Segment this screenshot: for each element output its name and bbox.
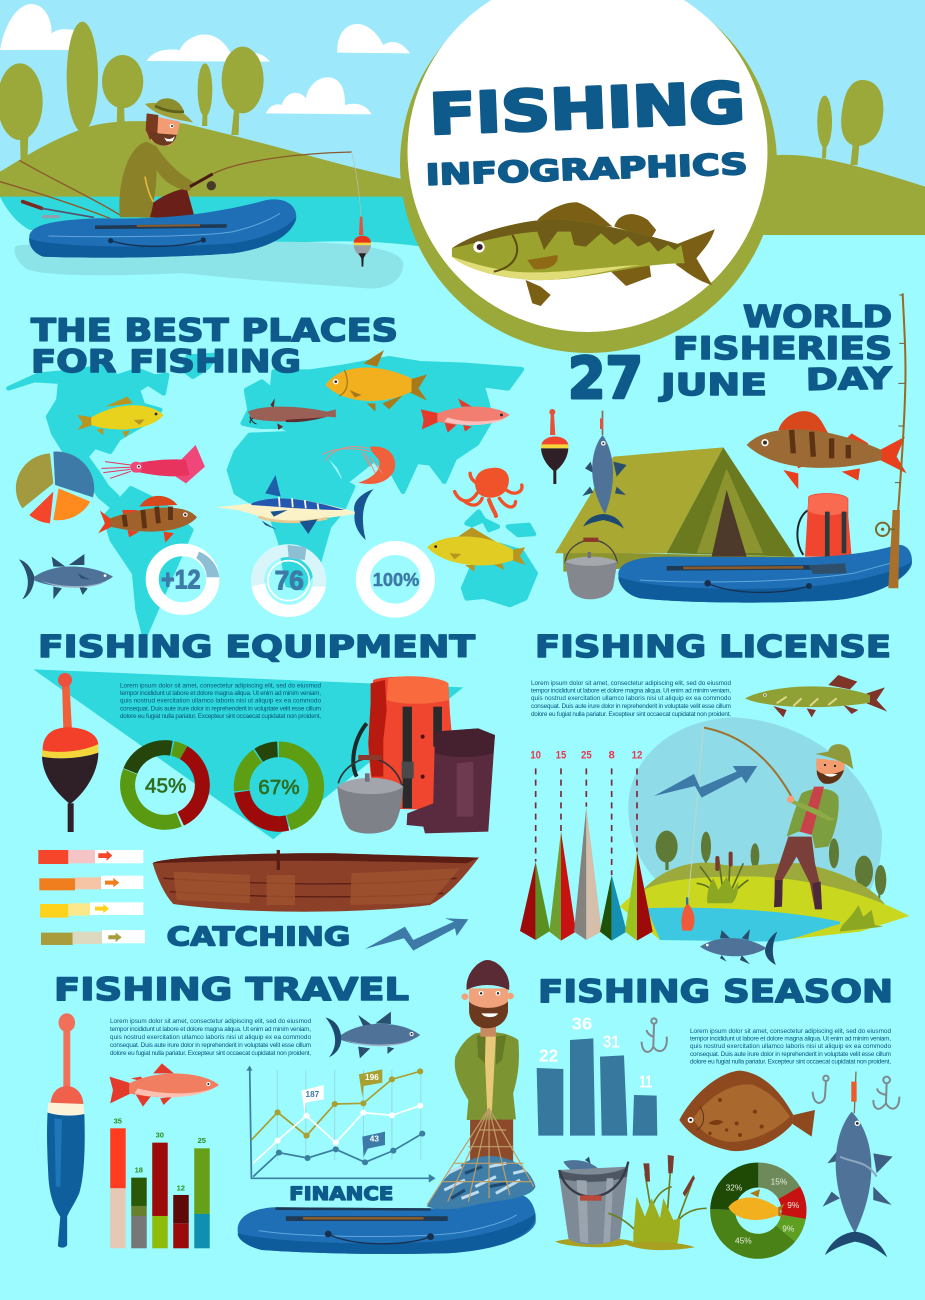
fish: tuna [19,554,113,599]
hanging tuna [823,1072,893,1257]
bar values: 31 [603,1032,620,1052]
bar 30: 30 [156,1130,164,1139]
world map [9,355,536,637]
equipment text block: quis nostrud exercitation ullamco laboris nisi ut aliquip ex ea commodo [120,698,321,705]
salmon [110,1063,219,1107]
travel text block [110,1018,311,1057]
boat with oar [618,545,912,603]
panel: fishing equipment [33,669,495,951]
heading: catching: CATCHING [167,921,350,951]
pyramid 25 [574,807,602,940]
pyramid values: 12 [632,749,642,761]
dashed guides [536,768,637,875]
subtitle: infographics: INFOGRAPHICS [425,147,748,192]
gold fish in centre [728,1189,785,1220]
fish: perch [98,496,197,543]
flag 196 [359,1069,382,1097]
bar values: 11 [639,1071,652,1091]
travel text block: consequat. Duis aute irure dolor in reprehenderit in voluptate velit esse cillum [110,1042,311,1049]
heading: fishing season: FISHING SEASON [538,974,893,1010]
bucket with fish [555,1157,633,1247]
backdrop blob [628,717,882,897]
badge ring [400,0,777,353]
fishing rod with line [190,152,361,217]
title badge [400,0,777,353]
trees on left hill [0,22,264,163]
heading: fishing license: FISHING LICENSE [535,630,891,665]
man with fishing net [455,960,519,1167]
clouds [0,4,410,114]
license text block: quis nostrud exercitation ullamco laboris nisi ut aliquip ex ea commodo [531,695,731,702]
wooden boat [153,850,479,912]
turquoise wedge [33,669,463,839]
equipment text block: tempor incididunt ut labore et dolore magna aliqua. Ut enim ad minim veniam, [120,690,321,697]
season text block: Lorem ipsum dolor sit amet, consectetur adipiscing elit, sed do eiusmod [690,1028,891,1035]
spare rods and oar [0,161,120,218]
flag 187 [301,1085,324,1114]
donut chart: 45% [114,734,216,836]
donut chart: 45%: 45% [145,775,186,798]
season text block: tempor incididunt ut labore et dolore magna aliqua. Ut enim ad minim veniam, [690,1036,891,1042]
perch [747,411,907,489]
fish: yellow carp lower [427,527,525,572]
treble hook [642,1018,667,1052]
fish: gold crucian [325,350,427,412]
panel: world map of fishing places [9,350,536,637]
donut chart: 67%: 67% [258,776,300,799]
donut labels: 32% [726,1182,743,1192]
title: fishing: FISHING [428,71,746,148]
hanging tuna [582,411,627,529]
panel: fishing license [520,675,909,965]
date: 27 june: JUNE [658,368,767,403]
tall fishing rod [876,293,905,588]
tent [555,447,795,572]
large float [42,673,98,832]
license text block: Lorem ipsum dolor sit amet, consectetur adipiscing elit, sed do eiusmod [531,680,731,687]
boat reflection [15,242,403,289]
heading: fishing travel: FISHING TRAVEL [54,972,409,1008]
season text block: consequat. Duis aute irure dolor in reprehenderit in voluptate velit esse cillum [690,1051,891,1058]
pike [745,675,887,717]
olive hills [640,863,887,907]
pyramid values: 25 [581,749,592,761]
progress ring: 100%: 100% [373,570,419,591]
backpack [353,676,453,810]
treble hook right [873,1077,899,1109]
pyramid values: 15 [556,749,566,761]
donut labels: 45% [735,1235,752,1245]
heading: the best places for fishing [31,313,398,380]
progress ring: +12 [152,550,219,609]
inflatable boat [29,199,296,258]
cooking pot [337,755,403,834]
tall float [47,1013,85,1248]
season text block: quis nostrud exercitation ullamco laboris nisi ut aliquip ex ea commodo [690,1043,891,1050]
license text block: tempor incididunt ut labore et dolore magna aliqua. Ut enim ad minim veniam, [531,688,731,694]
flag 196: 196 [365,1073,379,1082]
travel text block: dolore eu fugiat nulla pariatur. Excepteur sint occaecat cupidatat non proident, [110,1050,311,1057]
travel text block: quis nostrud exercitation ullamco laboris nisi ut aliquip ex ea commodo [110,1034,311,1041]
license text block: consequat. Duis aute irure dolor in reprehenderit in voluptate velit esse cillum [531,703,731,710]
date: 27 june [568,346,767,412]
progress ring: 100% [363,548,428,611]
season donut chart [708,1160,809,1261]
progress ring: +12: +12 [161,564,201,595]
donut labels: 9% [787,1200,800,1210]
travel text block: Lorem ipsum dolor sit amet, consectetur adipiscing elit, sed do eiusmod [110,1018,311,1025]
equipment text block: consequat. Duis aute irure dolor in reprehenderit in voluptate velit esse cillum [120,705,321,712]
fish: salmon [421,398,510,433]
reeds [608,1155,707,1250]
fish: yellow carp [77,397,164,437]
net with catch [427,1108,536,1209]
flag 187: 187 [305,1090,320,1099]
flag 43 [362,1132,385,1157]
heading: world fisheries day: WORLD [743,300,892,335]
tuna [325,1012,420,1058]
season text block: dolore eu fugiat nulla pariatur. Excepteur sint occaecat cupidatat non proident, [690,1058,891,1066]
cooking pot [565,538,617,599]
bar values [539,1013,652,1091]
pyramid chart [520,749,653,941]
tuna [700,929,777,965]
heading: the best places for fishing: THE BEST PLACES [31,313,398,349]
pyramid 8 [600,875,627,941]
bar values: 22 [539,1046,558,1066]
stacked bar chart [110,1116,210,1248]
fish: catfish [248,398,336,430]
heading: world fisheries day [673,300,894,398]
equipment text block [120,682,321,720]
header scene: fisherman in boat on lake [0,4,433,289]
octopus [455,468,522,516]
rising arrow [654,766,757,798]
flounder [679,1071,815,1151]
reeds [697,852,748,903]
fisherman [119,98,195,218]
single hook [813,1076,829,1103]
rising arrow [365,918,468,951]
season text block [690,1028,891,1066]
panel: fishing season [537,1013,899,1261]
float [354,217,371,267]
hooked red fish [681,897,694,931]
progress ring: 76: 76 [275,565,304,595]
flag 43: 43 [370,1135,379,1144]
squid [102,445,205,483]
license text block: dolore eu fugiat nulla pariatur. Excepteur sint occaecat cupidatat non proident, [531,711,731,718]
grass tuft [840,905,883,932]
bar 12: 12 [177,1184,185,1193]
panel: fishing travel [47,960,536,1254]
donut chart: 67% [227,735,331,838]
pyramid values: 8 [608,749,615,761]
donut labels: 15% [771,1177,788,1187]
rubber boots [407,728,495,833]
right hill with trees [763,80,925,235]
pyramid 15 [549,832,576,941]
heading: fishing equipment: FISHING EQUIPMENT [38,630,476,665]
panel: camp scene [541,293,912,603]
heading: world fisheries day: DAY [806,361,894,398]
float [541,409,568,484]
pyramid 12 [625,852,653,941]
donut labels: 9% [782,1224,795,1234]
pyramid 10 [520,862,550,940]
equipment text block: dolore eu fugiat nulla pariatur. Excepteur sint occaecat cupidatat non proident, [120,713,321,720]
line chart [246,1066,436,1183]
pie chart [16,452,94,523]
pyramid values: 10 [530,749,541,761]
bar 18: 18 [135,1165,143,1174]
lake [0,197,433,248]
pond [647,908,840,942]
license text block [531,680,731,718]
stat bars [38,850,145,945]
bar 35: 35 [114,1116,122,1125]
left hill [0,121,433,197]
badge disc [408,0,768,332]
marlin [215,475,374,540]
shrimp [322,446,395,484]
date: 27 june: 27 [568,346,643,412]
zander fish [452,202,715,306]
equipment text block: Lorem ipsum dolor sit amet, consectetur adipiscing elit, sed do eiusmod [120,682,321,690]
pyramid values [530,749,642,761]
heading: world fisheries day: FISHERIES [673,331,892,367]
angler with rod [688,728,853,909]
heading: finance: FINANCE [289,1183,393,1205]
travel text block: tempor incididunt ut labore et dolore magna aliqua. Ut enim ad minim veniam, [110,1026,311,1033]
donut labels [726,1177,800,1245]
grass shore [620,876,909,941]
bar values: 36 [572,1013,592,1033]
bar 25: 25 [198,1136,206,1145]
boat [238,1195,536,1254]
backpack [797,493,852,557]
landscape trees [656,831,886,898]
heading: the best places for fishing: FOR FISHING [31,344,301,380]
progress ring: 76 [251,545,326,617]
bar chart [537,1013,657,1136]
